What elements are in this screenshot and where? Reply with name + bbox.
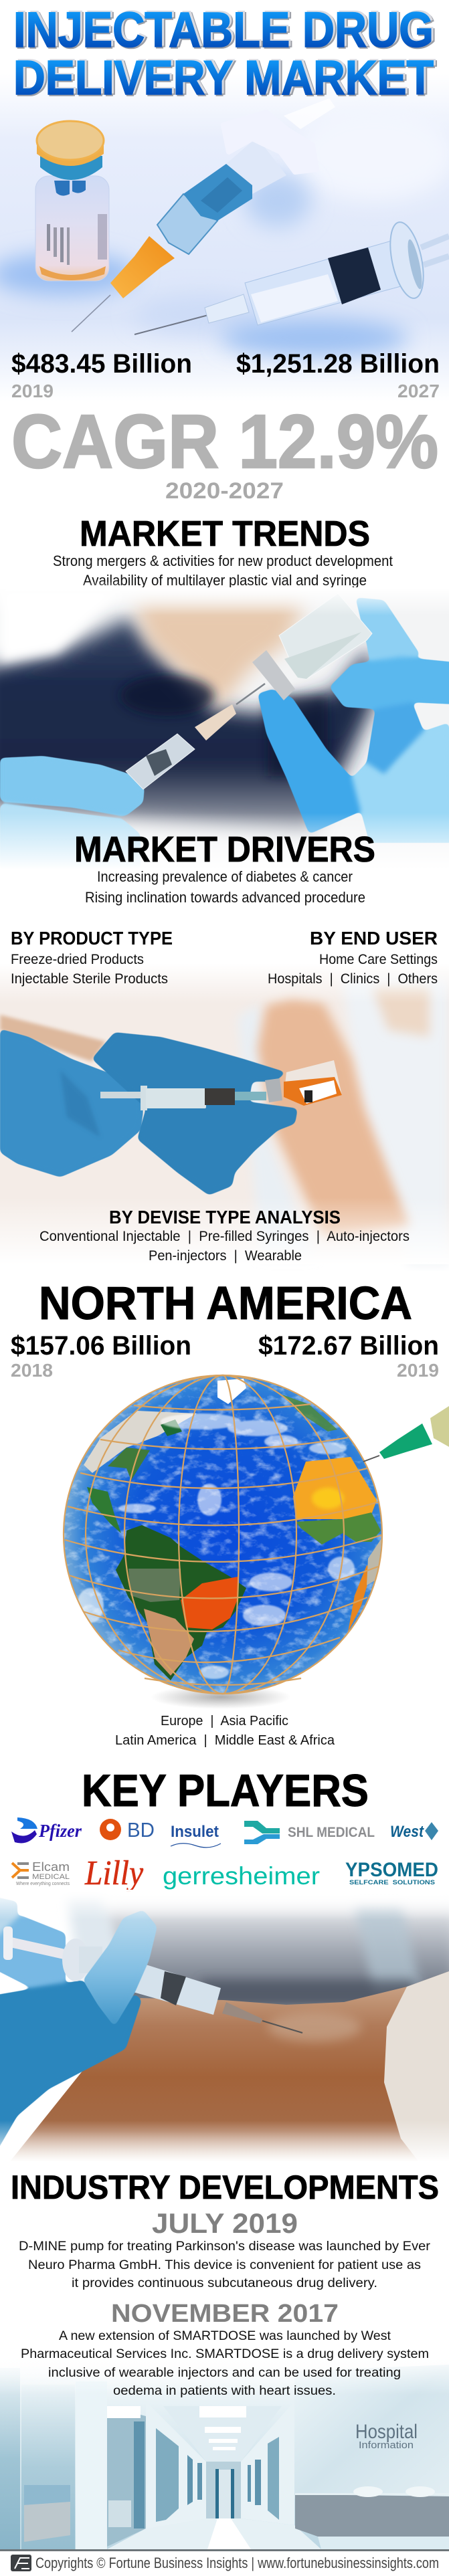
left glove <box>0 756 145 870</box>
north america 2018 value: 2018 <box>11 1360 53 1381</box>
right glove <box>258 597 449 843</box>
market drivers <box>74 829 375 906</box>
north america 2018 value: $157.06 Billion <box>11 1331 191 1361</box>
July 2019 development: D-MINE pump for treating Parkinson's disease was launched by Ever <box>19 2240 431 2254</box>
by end user: BY END USER <box>310 928 438 949</box>
by product type: Freeze-dried Products <box>11 952 144 967</box>
vial <box>35 121 109 281</box>
by devise type analysis: BY DEVISE TYPE ANALYSIS <box>109 1207 341 1227</box>
clouds <box>77 1413 355 1679</box>
clouds texture <box>60 1371 388 1699</box>
logo: Elcam Medical: Elcam <box>32 1860 70 1874</box>
north america 2019 value: 2019 <box>397 1360 439 1381</box>
bed <box>24 2485 70 2542</box>
photo: gloved hands filling syringe from vial <box>0 587 449 877</box>
by product type <box>11 928 173 987</box>
logo: SHL Medical: SHL MEDICAL <box>288 1825 375 1840</box>
hospital sign <box>355 2421 418 2451</box>
north america 2019 value: $172.67 Billion <box>258 1331 439 1361</box>
logo: BD: BD <box>127 1818 155 1842</box>
other regions <box>115 1714 335 1748</box>
by end user: Home Care Settings <box>319 952 438 967</box>
logo: West: West <box>390 1823 424 1841</box>
logo: Pfizer: Pfizer <box>38 1821 82 1841</box>
left glove <box>0 1029 143 1177</box>
syringe in globe <box>363 1406 449 1462</box>
other regions: Europe | Asia Pacific <box>161 1714 288 1728</box>
syringe with orange hub <box>72 98 335 332</box>
glove <box>0 1896 142 2157</box>
July 2019 development: JULY 2019 <box>152 2207 298 2239</box>
hospital corridor photo <box>0 2355 449 2550</box>
continents <box>84 1379 381 1680</box>
CAGR: 2020-2027 <box>165 478 284 504</box>
right glove <box>92 1032 298 1195</box>
by product type: Injectable Sterile Products <box>11 971 168 987</box>
logo: Ypsomed: YPSOMED <box>345 1859 438 1881</box>
logo: Ypsomed: SELFCARE SOLUTIONS <box>349 1879 435 1886</box>
footer logo <box>11 2555 31 2571</box>
market size 2019: 2019 <box>11 381 54 401</box>
logo: Elcam Medical <box>12 1860 70 1886</box>
hero image: vial and syringes <box>0 74 449 401</box>
logo: Insulet: Insulet <box>171 1823 219 1841</box>
logo: Lilly: Lilly <box>84 1854 144 1892</box>
by end user: Hospitals | Clinics | Others <box>268 971 438 987</box>
logo: SHL Medical <box>244 1821 375 1844</box>
north america 2019 value <box>258 1331 439 1381</box>
sleeve <box>384 1971 449 2174</box>
market size 2027: $1,251.28 Billion <box>236 349 440 379</box>
by devise type analysis <box>39 1207 410 1264</box>
logo: Pfizer <box>11 1817 82 1844</box>
photo: injection into arm <box>0 1890 449 2176</box>
logo: Elcam Medical: Where everything connects <box>16 1882 70 1886</box>
globe with syringe <box>60 1371 449 1709</box>
by devise type analysis: Conventional Injectable | Pre-filled Syringes | Auto-injectors <box>39 1229 410 1244</box>
hospital sign: Hospital <box>355 2421 418 2443</box>
market trends <box>53 514 393 589</box>
market size 2019: $483.45 Billion <box>11 349 192 379</box>
November 2017 development: NOVEMBER 2017 <box>111 2300 339 2328</box>
November 2017 development: inclusive of wearable injectors and can be used for treating <box>48 2366 401 2380</box>
by devise type analysis: Pen-injectors | Wearable <box>149 1248 302 1264</box>
logo: BD <box>100 1818 155 1842</box>
July 2019 development <box>19 2207 431 2290</box>
vial and syringe <box>126 593 372 789</box>
market size 2027 <box>236 349 440 401</box>
title <box>13 2 434 105</box>
grid lines <box>64 1375 382 1694</box>
market size 2027: 2027 <box>397 381 440 401</box>
footer <box>0 2549 449 2571</box>
photo: blue gloves holding syringe and orange vial <box>0 977 449 1244</box>
November 2017 development: Pharmaceutical Services Inc. SMARTDOSE is a drug delivery system <box>21 2347 429 2361</box>
syringe with black stopper <box>134 219 449 334</box>
July 2019 development: Neuro Pharma GmbH. This device is convenient for patient use as <box>28 2258 421 2272</box>
market drivers: Rising inclination towards advanced procedure <box>85 889 365 906</box>
syringe <box>3 1926 302 2033</box>
north america 2018 value <box>11 1331 191 1381</box>
logo: Elcam Medical: MEDICAL <box>32 1873 70 1881</box>
north america heading: NORTH AMERICA <box>39 1277 412 1329</box>
arm <box>13 1971 448 2159</box>
syringe and orange vial <box>100 1060 342 1110</box>
hospital sign: Information <box>359 2440 414 2451</box>
market trends: Strong mergers & activities for new product development <box>53 553 393 569</box>
market size 2019 <box>11 349 192 401</box>
market drivers: MARKET DRIVERS <box>74 829 375 870</box>
November 2017 development: A new extension of SMARTDOSE was launched by West <box>59 2329 391 2343</box>
other regions: Latin America | Middle East & Africa <box>115 1733 335 1748</box>
November 2017 development <box>21 2300 429 2398</box>
market trends: MARKET TRENDS <box>80 514 370 554</box>
November 2017 development: oedema in patients with heart issues. <box>113 2384 336 2398</box>
key players heading: KEY PLAYERS <box>82 1765 369 1816</box>
market drivers: Increasing prevalence of diabetes & cancer <box>97 868 353 885</box>
July 2019 development: it provides continuous subcutaneous drug delivery. <box>72 2276 377 2290</box>
reception desk <box>295 2486 449 2549</box>
by product type: BY PRODUCT TYPE <box>11 928 173 949</box>
by end user <box>268 928 438 987</box>
market trends: Availability of multilayer plastic vial and syringe <box>83 572 367 589</box>
logo: Gerresheimer: gerresheimer <box>163 1862 320 1890</box>
